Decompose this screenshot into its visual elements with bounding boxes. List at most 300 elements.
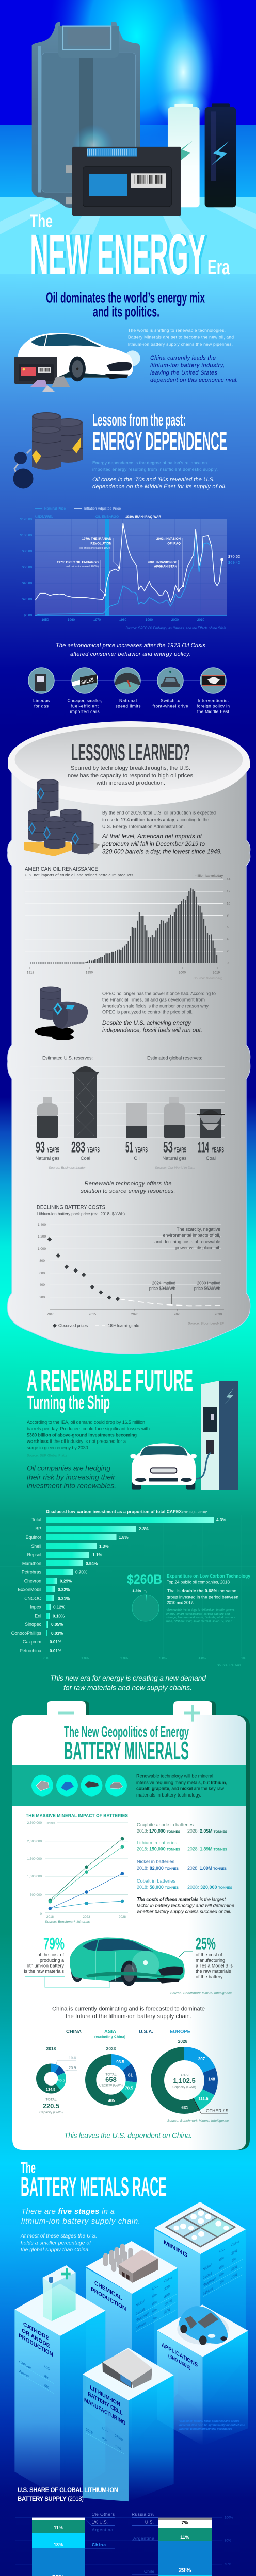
chart: donut 2023: TOTAL — [105, 2073, 117, 2077]
stat: 25%: of the cost of — [196, 1952, 222, 1957]
stats: mineral tonnes: Graphite anode in batteries — [137, 1822, 194, 1827]
chart: declining battery costs: 2015 — [89, 1313, 97, 1316]
chart: American oil renaissance: 12 — [227, 890, 231, 893]
axis labels: $0.00 — [24, 614, 32, 617]
footnote: renewable technology definition: storage, biomass and waste, biofuels, wind, onshore — [166, 1616, 235, 1619]
table: chemical shares: Lithium — [136, 2321, 146, 2331]
chart: 1.3% pie: 1.3% — [132, 1589, 141, 1593]
icon: white cylinder battery — [168, 104, 200, 207]
table: mining shares: China — [231, 2240, 239, 2248]
text block: by the end of 2019: U.S. Energy Information Administration. — [102, 824, 185, 829]
company labels: BP — [35, 1526, 41, 1531]
icon labels: Lineups — [33, 698, 50, 703]
company labels: Eni — [35, 1614, 41, 1619]
stat: 79%: lithium-ion battery — [27, 1963, 64, 1969]
annotations — [100, 514, 183, 594]
table: chemical shares: 7% — [152, 2316, 157, 2322]
chart: declining battery costs: 600 — [39, 1272, 45, 1275]
floor — [0, 197, 256, 274]
chart: lithium chemicals stacked bar: Chile — [144, 2569, 154, 2574]
icon labels: National — [119, 698, 137, 703]
chart: low-carbon investment bars: Source: Reuters — [217, 1664, 241, 1667]
callout: China leads — [150, 355, 238, 383]
text block: spurred: now has the capacity to respond to high oil prices — [68, 773, 193, 779]
panel: battery metals race — [14, 2160, 248, 2501]
icon: gas tank global — [164, 1097, 185, 1138]
heading: battery metals race: The — [21, 2160, 36, 2177]
icon: coal global — [197, 1109, 225, 1138]
panel: U.S. share of supply — [15, 2487, 233, 2576]
legend — [35, 507, 121, 511]
callout: fossil fuels run out — [102, 1020, 202, 1033]
reserve numbers: YEARS — [135, 1146, 148, 1154]
chart: lithium chemicals stacked bar: Argentina — [133, 2536, 154, 2541]
callout: China leads: China currently leads the — [150, 355, 216, 361]
chart: reserves: Oil — [134, 1156, 140, 1161]
chart: oil price line chart: 1980 — [119, 618, 127, 622]
panel: renewable future — [0, 1364, 256, 1691]
chart: lithium chemicals stacked bar — [132, 2512, 212, 2576]
text block: IEA: barrels per day. Producers could face significant losses with — [27, 1426, 150, 1431]
company labels: Petrochina — [20, 1648, 41, 1653]
label: lithium-ion battery cell manufacturing: BATTERY CELL — [88, 2391, 123, 2417]
chart: mineral impact line chart: 2,000,000 — [27, 1840, 42, 1843]
chart: oil price line chart: $70.62 — [228, 554, 240, 559]
label: lithium-ion battery cell manufacturing: MANUFACTURING — [84, 2397, 126, 2427]
axis labels: 5.0% — [238, 1657, 246, 1660]
table: chemical shares: Cobalt — [136, 2307, 145, 2316]
table: chemical shares: 100% — [164, 2299, 172, 2307]
chart: donut 2028 — [157, 2039, 228, 2114]
chart: lithium stacked bar: Argentina — [92, 2527, 113, 2532]
chart: oil price line chart: OIL EMBARGO — [95, 515, 119, 519]
chart: declining battery costs: 200 — [39, 1296, 45, 1299]
chart: oil price line chart: 2010 — [197, 618, 205, 622]
table: mining shares: 0% — [219, 2264, 224, 2270]
reserve numbers: 51 — [125, 1139, 133, 1156]
chart: mineral impact line chart: THE MASSIVE MINERAL IMPACT OF BATTERIES — [26, 1812, 128, 1818]
reserve numbers: 53 — [163, 1139, 173, 1156]
callout: five stages: lithium-ion battery supply chain. — [21, 2217, 140, 2226]
company labels: CNOOC — [24, 1596, 42, 1601]
chart: declining battery costs: price $94/kWh — [149, 1286, 175, 1291]
icon labels: foreign policy in — [197, 704, 230, 709]
text block: at most stages: the global supply than China. — [21, 2247, 90, 2253]
chart: declining battery costs: power will displace oil. — [175, 1245, 220, 1250]
chart: American oil renaissance: 2000 — [179, 971, 186, 975]
table: chemical shares: Nickel — [136, 2299, 145, 2308]
axis labels: $60.00 — [22, 566, 32, 569]
axis labels: $80.00 — [22, 550, 32, 553]
chart: mineral impact line chart: 2028 — [119, 1915, 126, 1919]
icon: lithium rock — [31, 1775, 53, 1797]
company labels: Equinor — [26, 1535, 41, 1540]
chart: donut 2018: 45.5 — [58, 2079, 65, 2083]
reserve numbers: 93 — [36, 1139, 45, 1156]
series: inflation adjusted price — [35, 523, 222, 602]
chart: declining battery costs: 2025 — [174, 1313, 182, 1316]
value labels: 0.01% — [50, 1640, 62, 1645]
chart: declining battery costs: 2010 — [47, 1313, 55, 1316]
chart: American oil renaissance: 1918 — [27, 971, 35, 975]
table: cathode shares: U.S. — [44, 2365, 51, 2372]
heading: lessons from the past — [92, 411, 227, 455]
label: cathode or anode production: OR ANODE — [22, 2327, 50, 2350]
text block: by the end of 2019 — [102, 810, 216, 829]
chart: declining battery costs: 2030 implied — [197, 1281, 220, 1286]
stat: 25% — [179, 1935, 233, 1979]
chart: low-carbon investment bars: (2010-Q3 2018)* — [182, 1511, 208, 1514]
callout: China leads: lithium-ion battery industry, — [150, 363, 225, 369]
heading: battery metals race — [21, 2160, 167, 2202]
chart: donut 2018: 19.6 — [69, 2056, 76, 2060]
stats: mineral tonnes: Nickel in batteries — [137, 1859, 174, 1865]
chart: reserves — [30, 1055, 225, 1170]
stat: 79%: 79% — [43, 1935, 65, 1953]
label: cathode or anode production — [19, 2321, 53, 2359]
icon: barrels on pallet — [24, 779, 100, 856]
footnote: renewable technology definition — [166, 1609, 235, 1623]
stage: chemical production tower — [86, 2241, 178, 2446]
axis labels: $40.00 — [22, 582, 32, 585]
company labels: Shell — [31, 1544, 41, 1549]
icon: white car with battery and rocks — [14, 333, 140, 392]
company labels: Chevron — [24, 1579, 41, 1584]
table: chemical shares: U.S. — [152, 2284, 158, 2291]
icon: car sales — [72, 668, 98, 693]
callout: net imports: 320,000 barrels a day, the lowest since 1949. — [102, 849, 222, 855]
chart: donut 2028: 207 — [198, 2057, 205, 2061]
chart: donut 2028: 631 — [181, 2106, 188, 2110]
stats: mineral tonnes — [137, 1822, 233, 1890]
axis labels: $120.00 — [20, 518, 32, 521]
company labels: Inpex — [30, 1604, 42, 1609]
chart: donut 2028: Capacity (GWh) — [172, 2085, 196, 2089]
chart: declining battery costs: 400 — [39, 1283, 45, 1287]
chart: lithium stacked bar: 13% — [54, 2542, 63, 2547]
table: chemical shares: China — [164, 2276, 172, 2284]
heading: U.S. share: BATTERY SUPPLY (2018) — [18, 2496, 84, 2502]
icon labels: speed limits — [116, 704, 140, 709]
table: mining shares: 13% — [231, 2273, 237, 2280]
chart: American oil renaissance: 6 — [227, 926, 229, 929]
chart: declining battery costs: 2024 implied — [152, 1281, 175, 1286]
reserve numbers: 114 — [198, 1139, 209, 1156]
heading: U.S. share: U.S. SHARE OF GLOBAL LITHIUM-ION — [18, 2487, 118, 2494]
footnote: natural flake — [179, 2420, 245, 2431]
value labels: 4.3% — [216, 1518, 226, 1522]
reserve numbers: 283 — [71, 1139, 85, 1156]
callout: costs of materials: The costs of these materials is the largest — [137, 1897, 226, 1902]
callout: China leads: leaving the United States — [150, 370, 218, 376]
text block: energy dependence definition — [92, 460, 218, 472]
icon: speed limits — [115, 668, 140, 693]
label: lithium-ion battery cell manufacturing — [84, 2384, 126, 2427]
axis labels: 3.0% — [159, 1657, 167, 1660]
chart: oil price line chart — [20, 507, 240, 630]
value labels: 0.01% — [50, 1649, 62, 1653]
icon: spilled oil barrels — [35, 986, 88, 1040]
value labels: 0.12% — [53, 1605, 66, 1609]
icon: front-wheel drive car — [157, 668, 183, 693]
title: The: The — [30, 211, 53, 231]
chart: low-carbon investment bars: Disclosed low-carbon investment as a proportion of total CAPEX — [46, 1509, 182, 1514]
table: cathode shares — [19, 2360, 54, 2394]
icon labels: for gas — [34, 704, 49, 709]
reserve numbers — [36, 1139, 224, 1156]
chart: reserves: Source: Business Insider — [49, 1166, 86, 1170]
text block: world shifting: The world is shifting to renewable technologies. — [128, 328, 226, 333]
text block: energy dependence definition: Energy dependence is the degree of nation’s reliance on — [92, 460, 207, 465]
battery shape — [12, 1701, 250, 2150]
chart: reserves: Estimated global reserves: — [147, 1055, 202, 1060]
chart: oil price line chart: (oil prices increased 400%) — [66, 565, 99, 568]
text block: spurred: with increased production. — [96, 780, 165, 786]
icon: lineups for gas — [28, 668, 54, 693]
table: chemical shares: Graphite* — [136, 2312, 149, 2323]
text block: IEA: Source: S&P Global Platts — [27, 1454, 67, 1458]
callout: net imports: At that level, American net imports of — [102, 834, 203, 840]
stats: mineral tonnes: 2028: 1.89M TONNES — [187, 1846, 228, 1852]
icon: battery cell — [102, 2349, 152, 2388]
stat: $260B: Expenditure on Low Carbon Technology — [167, 1573, 250, 1579]
chart: donut 2028: 1,102.5 — [173, 2077, 196, 2084]
table: mining shares: 0% — [219, 2256, 224, 2262]
text block: IEA — [26, 1420, 150, 1458]
stat: $260B: $260B — [127, 1572, 162, 1587]
stage: lithium-ion cell manufacturing tower — [83, 2348, 174, 2501]
chart: lithium stacked bar: China — [92, 2542, 106, 2547]
icon: salt ponds — [166, 2208, 235, 2247]
icons row: consumer behaviour — [28, 668, 230, 714]
chart: declining battery costs: and declining costs of renewable — [154, 1239, 220, 1244]
chart: mineral impact line chart: 2018 — [46, 1915, 54, 1919]
icon: factory — [103, 2244, 158, 2283]
icon: glass battery — [43, 2265, 76, 2321]
chart: American oil renaissance: 10 — [227, 902, 231, 906]
chart: mineral impact line chart: Source: Benchmark Minerals — [45, 1920, 90, 1924]
icon labels: Interventionist — [198, 698, 229, 703]
chart: donut 2028: 111.5 — [198, 2097, 209, 2102]
text block: mineral intensive: materials in battery technology. — [136, 1792, 201, 1798]
callout: new era — [50, 1674, 206, 1691]
chart: donut 2023: 658 — [105, 2076, 117, 2083]
table: mining shares: 1% — [231, 2257, 236, 2263]
stage: mining tower — [154, 2202, 246, 2411]
text block: mineral intensive: intensive requiring many metals, but lithium, — [136, 1780, 227, 1785]
axis: percent scale: 100% — [225, 2516, 233, 2519]
table: chemical shares: 57% — [164, 2308, 170, 2315]
chart: lithium chemicals stacked bar: 7% — [181, 2520, 188, 2526]
table: mining shares: 56% — [231, 2265, 237, 2272]
chart: oil price line chart: 2000 — [171, 618, 179, 622]
stats: mineral tonnes: 2028: 1.09M TONNES — [187, 1866, 227, 1871]
text block: IEA: surge in green energy by 2030. — [27, 1445, 89, 1450]
text block: China dominating: China is currently dominating and is forecasted to dominate — [52, 2006, 205, 2012]
callout: costs of materials: factor in battery technology and will determine — [137, 1903, 234, 1908]
stat: 79%: producing a — [40, 1958, 64, 1963]
icon: small black battery — [66, 147, 181, 216]
chart: American oil renaissance: 8 — [227, 914, 229, 918]
callout: astronomical price: altered consumer behavior and energy policy. — [70, 651, 190, 657]
icon: oil barrels with ball and chain — [13, 412, 83, 488]
chart: oil price line chart: 1973: OPEC OIL EMBARGO — [57, 561, 99, 564]
callout: oil companies hedging — [27, 1464, 116, 1490]
icon: dark cylinder battery — [205, 103, 236, 207]
table: cell manufacturing shares — [85, 2426, 124, 2454]
chart: oil price line chart: 1990 — [146, 618, 153, 622]
icon labels: Switch to — [161, 698, 180, 703]
stats: mineral tonnes: 2028: 2.05M TONNES — [187, 1828, 228, 1834]
icon labels: Cheaper, smaller, — [67, 698, 102, 703]
chart: reserves: Natural gas — [36, 1156, 60, 1161]
chart: mineral impact line chart: 2023 — [83, 1915, 90, 1919]
table: cathode shares: Cathode — [19, 2360, 31, 2370]
chart: donut 2023: 81 — [128, 2073, 133, 2077]
legend: regions: EUROPE — [170, 2029, 190, 2035]
icon: minus terminal — [58, 1711, 74, 1715]
stats: mineral tonnes: Lithium in batteries — [137, 1840, 178, 1845]
panel: battery minerals — [12, 1701, 250, 2150]
chart: oil price line chart: 1950 — [41, 618, 49, 622]
chart: lithium stacked bar: 11% — [54, 2525, 63, 2530]
stats: mineral tonnes: 2018: 82,000 TONNES — [137, 1866, 179, 1871]
legend: regions — [66, 2029, 190, 2039]
text block: energy dependence definition: imported energy resulting from insufficient domestic supply. — [92, 467, 218, 472]
stats: mineral tonnes: Cobalt in batteries — [137, 1878, 175, 1884]
chart: donut 2028: TOTAL — [179, 2073, 190, 2077]
value labels: 0.21% — [58, 1596, 70, 1601]
chart: mineral impact line chart: 1,000,000 — [27, 1875, 42, 1878]
chart: mineral impact line chart: Tonnes — [45, 1822, 55, 1825]
table: mining shares: 0% — [219, 2272, 224, 2278]
chart: donut 2018: 220.5 — [43, 2102, 59, 2110]
chart: donut 2018: 134.5 — [46, 2087, 55, 2092]
text block: IEA: According to the IEA, oil demand could drop by 16.5 million — [27, 1420, 145, 1425]
text block: IEA: $380 billion of above-ground investments becoming — [27, 1432, 137, 1437]
table: cell manufacturing shares: 67% — [115, 2444, 121, 2451]
company labels: Marathon — [22, 1561, 41, 1566]
stats: mineral tonnes: 2028: 320,000 TONNES — [187, 1885, 233, 1890]
chart: oil price line chart: 1979: THE IRANIAN — [82, 537, 112, 541]
chart: declining battery costs: 1,000 — [38, 1247, 46, 1251]
text block: world shifting: lithium-ion battery supply chains the new pipelines. — [128, 342, 233, 347]
table: cathode shares: 8% — [44, 2374, 49, 2381]
callout: renewable technology: Renewable technology offers the — [85, 1181, 171, 1187]
icon: nickel rock — [105, 1775, 127, 1797]
chart: 1.3% pie — [132, 1589, 159, 1621]
callout: leaves U.S. dependent: This leaves the U.S. dependent on China. — [64, 2131, 192, 2139]
company labels: ExxonMobil — [18, 1587, 41, 1592]
callout: five stages: There are five stages in a — [21, 2207, 115, 2216]
text block: world shifting — [128, 328, 234, 347]
panel: lessons learned barrel — [8, 721, 250, 1354]
text block: by the end of 2019: By the end of 2019, total U.S. oil production is expected — [102, 810, 216, 815]
stat: 25%: the raw materials — [196, 1969, 231, 1974]
table: mining shares: U.S. — [219, 2247, 226, 2254]
stat: $260B: group invested in the period between — [167, 1595, 238, 1600]
chart: donut 2018: 2018 — [46, 2046, 56, 2052]
stat: $260B — [127, 1572, 250, 1605]
chart: mineral impact line chart: 1,500,000 — [27, 1857, 42, 1861]
reserve numbers: YEARS — [87, 1146, 100, 1154]
chart: declining battery costs: 800 — [39, 1259, 45, 1263]
heading: oil dominates — [46, 290, 205, 320]
callout: net imports: petroleum will fall in December 2019 to — [102, 841, 205, 848]
callout: renewable technology: solution to scarce energy resources. — [81, 1188, 175, 1194]
icon: plus terminal — [184, 1705, 200, 1722]
value labels: 2.3% — [139, 1527, 149, 1531]
legend: regions: CHINA — [66, 2029, 82, 2035]
chart: American oil renaissance: 1950 — [86, 971, 93, 975]
chart: oil price line chart: (oil prices increased 100%) — [79, 547, 111, 550]
value labels: 1.8% — [119, 1535, 129, 1540]
chart: lithium chemicals stacked bar: Russia 2% — [132, 2512, 155, 2517]
text block: by the end of 2019: to rise to 17.4 million barrels a day, according to the — [102, 817, 209, 822]
stat: $260B: 2010 and 2017. — [167, 1600, 194, 1605]
chart: low-carbon investment bars — [0, 1509, 256, 1667]
heading: oil dominates: and its politics. — [93, 304, 159, 320]
callout: astronomical price: The astronomical price increases after the 1973 Oil Crisis — [56, 642, 205, 649]
panel: hero batteries — [0, 0, 256, 274]
chart: donut 2023 — [91, 2046, 133, 2103]
axis labels: $20.00 — [22, 598, 32, 601]
chart: American oil renaissance: AMERICAN OIL RENAISSANCE — [25, 866, 98, 872]
footnote: natural flake: *Based on natural flake, spherical and anode — [179, 2420, 240, 2423]
text block: at most stages: At most of these stages the U.S. — [20, 2233, 97, 2239]
chart: donut 2018: TOTAL — [45, 2098, 57, 2102]
footnote: renewable technology definition: *Renewable technology is defined as: frontier power, — [166, 1609, 235, 1612]
chart: donut 2018: Capacity (GWh) — [39, 2111, 63, 2114]
stage: cathode or anode tower — [14, 2265, 105, 2498]
callout: China leads: dependent on this economic rival. — [150, 377, 238, 383]
icon: large battery pack — [32, 22, 140, 208]
stat: 25%: 25% — [196, 1935, 216, 1953]
text block: mineral intensive: Renewable technology will be mineral — [136, 1773, 213, 1778]
callout: five stages — [21, 2207, 140, 2226]
table: mining shares: 32% — [231, 2249, 237, 2256]
chart: declining battery costs: environmental impacts of oil, — [163, 1233, 220, 1238]
chart: American oil renaissance: 2 — [227, 950, 229, 953]
callout: oil companies hedging: Oil companies are hedging — [27, 1464, 110, 1472]
stats: mineral tonnes: 2018: 170,000 TONNES — [137, 1828, 181, 1834]
company labels: Gazprom — [23, 1639, 41, 1645]
table: cell manufacturing shares: 9% — [102, 2436, 107, 2443]
chart: oil price line chart: 2001: INVASION OF — [148, 561, 177, 564]
label: cathode or anode production: PRODUCTION — [19, 2332, 53, 2359]
table: mining shares: Cobalt — [203, 2271, 212, 2280]
axis labels: 2.0% — [120, 1657, 128, 1660]
source: capacity: Source: Benchmark Mineral Intelligence — [167, 2119, 229, 2123]
reserve numbers: YEARS — [47, 1146, 59, 1154]
table: cathode shares: 0% — [44, 2384, 49, 2390]
chart: oil price line chart: 1960 — [68, 618, 75, 622]
chart: lithium chemicals stacked bar: 29% — [178, 2567, 191, 2574]
chart: oil price line chart: 1980: IRAN-IRAQ WAR — [125, 515, 162, 519]
text block: OPEC: the Financial Times, oil and gas development from — [102, 997, 205, 1003]
icon: white car front — [130, 1443, 197, 1490]
chart: oil price line chart: $69.42 — [228, 560, 240, 565]
text block: OPEC: OPEC is paralyzed to control the price of oil. — [102, 1010, 193, 1015]
value labels: 0.05% — [51, 1622, 63, 1627]
value labels: 0.29% — [60, 1579, 72, 1584]
chart: donut 2023: 78.5 — [125, 2086, 133, 2090]
chart: American oil renaissance: U.S. net imports of crude oil and refined petroleum products — [25, 873, 133, 877]
stat: 25%: of the battery — [196, 1974, 223, 1979]
callout: net imports — [102, 834, 222, 855]
company labels — [11, 1517, 42, 1653]
chart: declining battery costs: The scarcity, negative — [177, 1227, 220, 1232]
